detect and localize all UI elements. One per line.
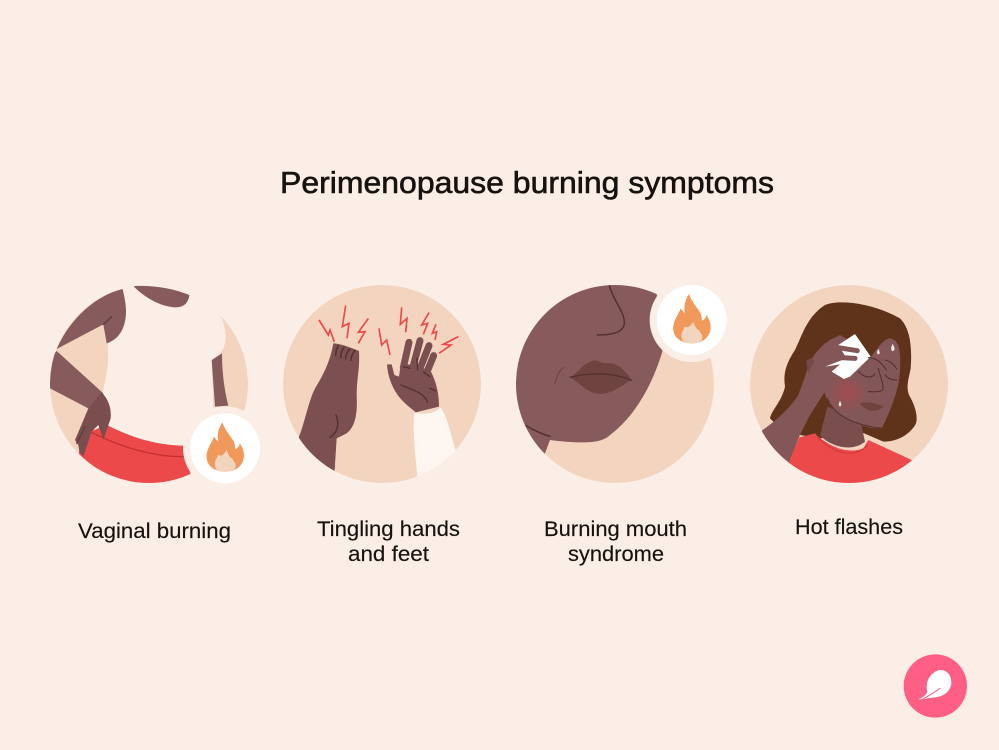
- red tingle bolts: [319, 306, 458, 355]
- label: Tingling hands: [317, 518, 460, 541]
- label: Burning mouth: [544, 518, 687, 541]
- label: [544, 518, 687, 566]
- panel: vaginal burning: [47, 282, 267, 543]
- label: [317, 518, 460, 566]
- illustration: woman wiping forehead: [750, 285, 948, 488]
- label: syndrome: [568, 543, 664, 566]
- title: Perimenopause burning symptoms: [280, 165, 774, 200]
- label: Vaginal burning: [78, 520, 231, 543]
- illustration: lower face: [516, 285, 726, 483]
- label: and feet: [348, 543, 429, 566]
- panel: burning mouth syndrome: [510, 275, 734, 566]
- logo: feather badge: [904, 654, 967, 718]
- illustration: foot and hand: [283, 285, 481, 488]
- icon: flame badge: [650, 278, 734, 362]
- label: Hot flashes: [795, 516, 903, 539]
- icon: flame badge: [183, 406, 267, 490]
- illustration: torso with hand on hip: [47, 282, 267, 490]
- panel: tingling hands and feet: [283, 285, 481, 566]
- panel: hot flashes: [750, 285, 948, 539]
